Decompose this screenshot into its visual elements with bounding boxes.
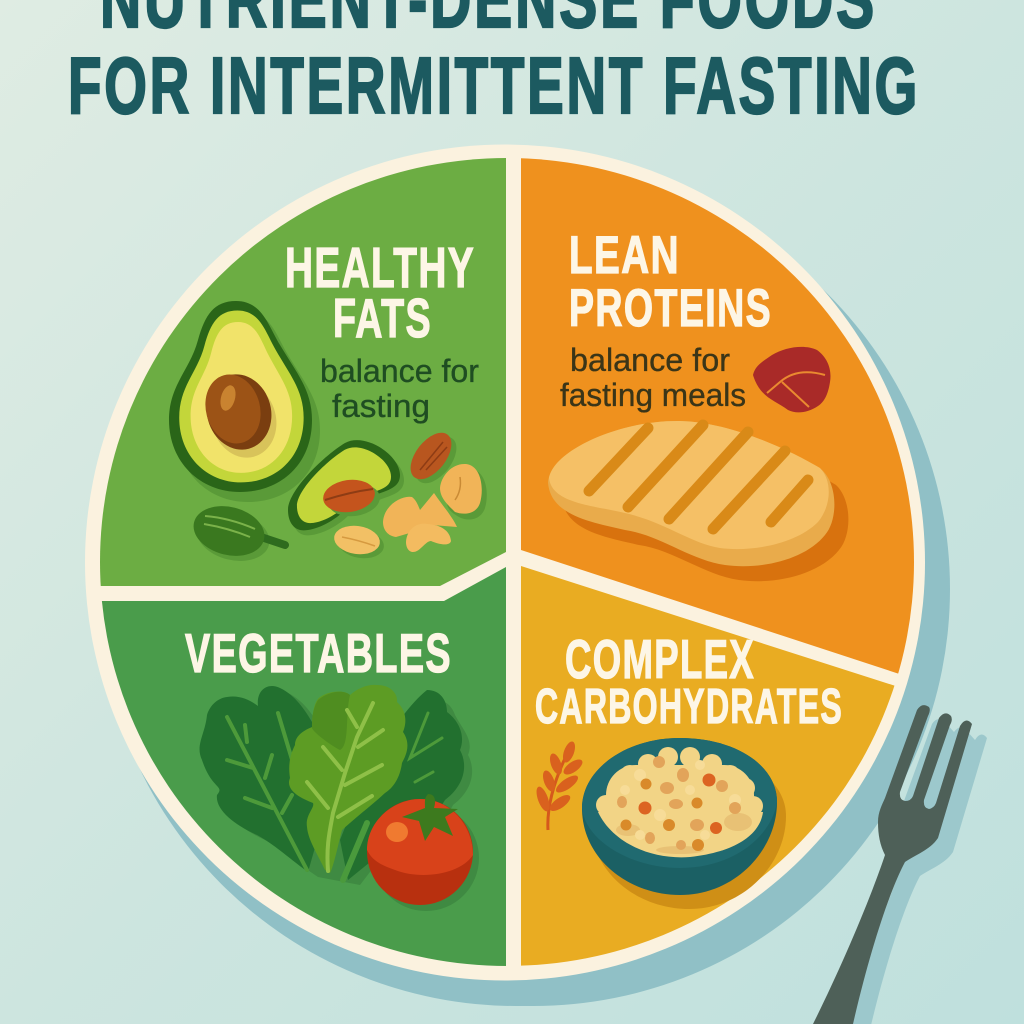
icon: red meat: [753, 347, 830, 412]
panel: complex carbohydrates: [521, 566, 894, 966]
icon: grilled chicken: [548, 421, 848, 581]
heading: lean proteins: LEAN: [569, 226, 680, 285]
heading: healthy fats: [285, 236, 475, 349]
heading: lean proteins: [569, 226, 772, 338]
heading: complex carbohydrates: COMPLEX: [565, 628, 755, 690]
icon: fork shadow: [828, 719, 987, 1024]
heading: healthy fats: HEALTHY: [285, 236, 475, 300]
panel: lean proteins: [521, 150, 930, 684]
icon: leafy greens: [200, 685, 472, 885]
icon: nuts: [321, 425, 487, 561]
icon: tomato: [367, 794, 479, 911]
icon: grain bowl: [582, 738, 786, 909]
icon: pumpkin seed: [188, 499, 285, 568]
title: [68, 0, 920, 130]
text: healthy fats note: balance for: [320, 353, 479, 389]
panel: healthy fats: [90, 150, 930, 980]
text: lean proteins note: balance for: [570, 342, 730, 378]
panel: vegetables: [90, 567, 506, 980]
icon: avocado slice: [288, 440, 404, 535]
plate shadow: [99, 172, 950, 1006]
plate: [85, 144, 930, 980]
icon: wheat sprig: [534, 740, 585, 830]
text: lean proteins note: [560, 342, 746, 413]
heading: vegetables: VEGETABLES: [185, 622, 452, 684]
heading: lean proteins: PROTEINS: [569, 279, 772, 338]
icon: avocado: [169, 301, 320, 502]
icon: fork: [813, 705, 972, 1024]
heading: complex carbohydrates: CARBOHYDRATES: [535, 680, 843, 734]
heading: complex carbohydrates: [535, 628, 843, 734]
text: lean proteins note: fasting meals: [560, 377, 746, 413]
heading: healthy fats: FATS: [333, 287, 432, 349]
text: healthy fats note: fasting: [332, 388, 430, 424]
text: healthy fats note: [320, 353, 479, 424]
